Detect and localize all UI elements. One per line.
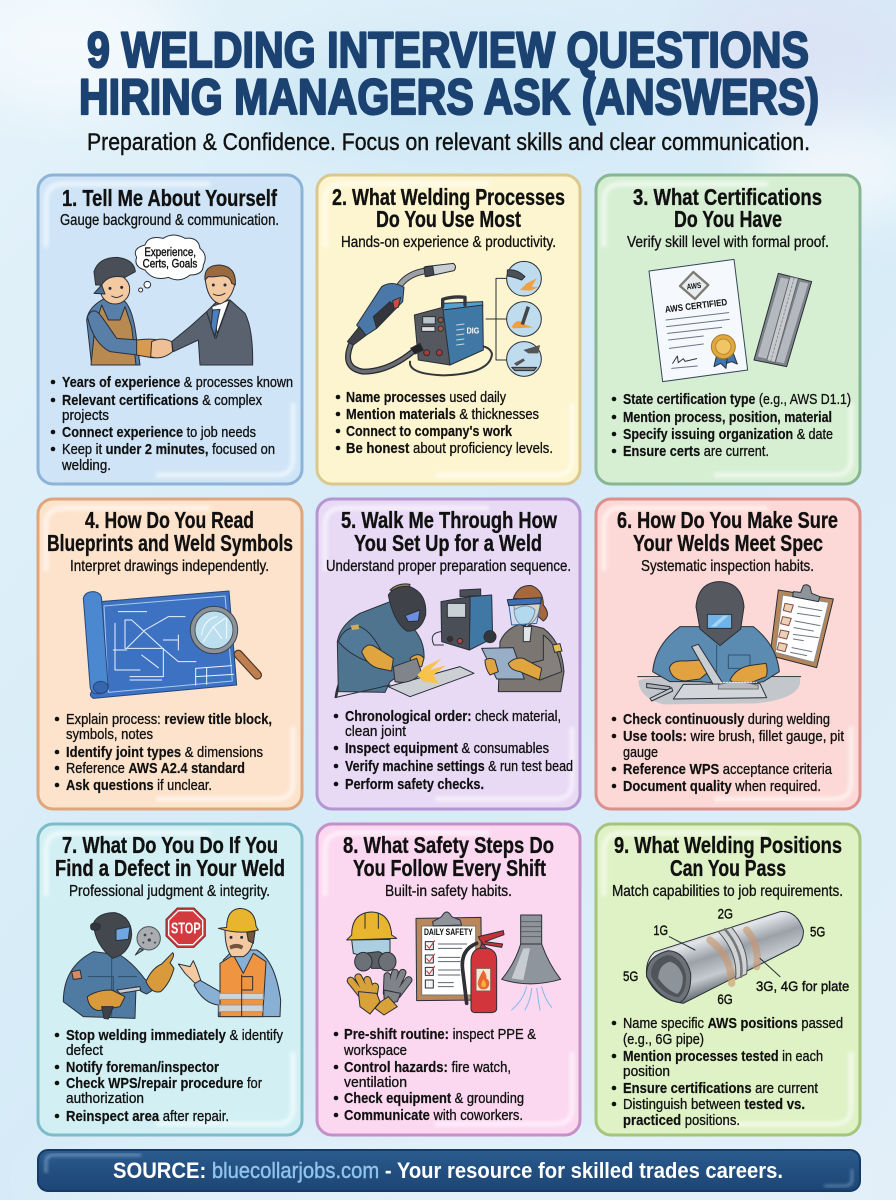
heading 8: You Follow Every Shift (353, 855, 546, 881)
subheading 6: Systematic inspection habits. (641, 558, 814, 575)
heading 8 (343, 832, 554, 881)
bullet list 7: Notify foreman/inspector (66, 1059, 219, 1076)
illustration: pipe with labelled welding positions (623, 905, 850, 1007)
heading 9: 9. What Welding Positions (614, 832, 842, 858)
heading 3 (633, 184, 822, 232)
bullet list 5: Inspect equipment & consumables (345, 740, 549, 757)
bullet list 1: welding. (61, 457, 111, 474)
heading 3: Do You Have (674, 206, 782, 232)
heading 7: 7. What Do You Do If You (62, 832, 278, 858)
heading 6: Your Welds Meet Spec (633, 530, 823, 556)
illustration: pipe with labelled welding positions: 3G, 4G for plate (756, 978, 850, 994)
subheading 9: Match capabilities to job requirements. (612, 883, 843, 900)
subtitle: Preparation & Confidence. Focus on relevant skills and clear communication. (87, 129, 810, 156)
illustration: AWS certificate and weld coupon: AWS (686, 281, 702, 292)
heading 4: 4. How Do You Read (85, 507, 254, 533)
bullet list 9: Ensure certifications are current (623, 1080, 819, 1097)
heading 9: Can You Pass (670, 855, 786, 881)
bullet list 8: Communicate with coworkers. (344, 1107, 523, 1124)
title (79, 22, 819, 125)
bullet list 9: Distinguish between tested vs. (623, 1096, 805, 1113)
subheading 4: Interpret drawings independently. (70, 558, 269, 575)
bullet list 5: Verify machine settings & run test bead (345, 758, 573, 775)
bullet list 1: projects (62, 407, 109, 424)
illustration: MIG welder and torch with process insets (347, 261, 541, 376)
heading 6 (617, 507, 838, 556)
bullet list 8: ventilation (344, 1074, 407, 1091)
bullet list 7: Check WPS/repair procedure for (66, 1075, 262, 1092)
illustration: pipe with labelled welding positions: 2G (718, 905, 733, 921)
panel 1: tell me about yourself (38, 175, 302, 484)
bullet list 9: Name specific AWS positions passed (623, 1015, 843, 1032)
subheading 1: Gauge background & communication. (60, 212, 279, 229)
bullet list 7: defect (66, 1042, 104, 1059)
heading 7 (55, 832, 285, 881)
bullet list 1: Relevant certifications & complex (62, 392, 262, 409)
bullet list 2: Connect to company's work (346, 423, 513, 440)
heading 8: 8. What Safety Steps Do (343, 832, 554, 858)
bullet list 6: Document quality when required. (623, 778, 821, 795)
bullet list 1 (51, 374, 293, 474)
bullet list 6 (612, 711, 845, 795)
bullet list 2: Name processes used daily (346, 389, 506, 406)
panel 4: blueprints and weld symbols (38, 499, 302, 809)
bullet list 9 (612, 1015, 843, 1129)
bullet list 4 (55, 711, 272, 794)
illustration: pipe with labelled welding positions: 5G (810, 924, 825, 940)
heading 5: 5. Walk Me Through How (341, 507, 557, 533)
bullet list 4: Ask questions if unclear. (66, 777, 212, 794)
subheading 8: Built-in safety habits. (385, 883, 512, 900)
illustration: welder reporting a defect to foreman with stop sign (63, 908, 281, 1019)
heading 4 (47, 507, 293, 556)
illustration: AWS certificate and weld coupon: AWS CERTIFIED (664, 297, 728, 315)
bullet list 6: Check continuously during welding (623, 711, 830, 728)
subheading 7: Professional judgment & integrity. (69, 883, 270, 900)
panel 6: meet spec (596, 499, 860, 809)
illustration: welder shaking hands with hiring manager: Experience, (144, 245, 196, 259)
panel 9: welding positions (596, 824, 860, 1135)
bullet list 7 (55, 1027, 283, 1125)
bullet list 7: Stop welding immediately & identify (66, 1027, 283, 1044)
bullet list 5: Chronological order: check material, (345, 708, 561, 725)
bullet list 4: Identify joint types & dimensions (66, 744, 263, 761)
subheading 3: Verify skill level with formal proof. (627, 234, 829, 251)
bullet list 6: gauge (623, 744, 658, 761)
illustration: pipe with labelled welding positions: 1G (653, 922, 668, 938)
heading 5: You Set Up for a Weld (354, 530, 542, 556)
bullet list 5: clean joint (345, 723, 407, 740)
bullet list 5 (334, 708, 573, 793)
bullet list 4: symbols, notes (66, 726, 153, 743)
bullet list 1: Connect experience to job needs (62, 424, 256, 441)
illustration: blueprint with magnifying glass (83, 591, 257, 698)
illustration: PPE, daily safety checklist, fire extinguisher and fume hood: DAILY SAFETY (424, 927, 473, 937)
source footer bar (38, 1150, 860, 1191)
bullet list 7: authorization (66, 1090, 144, 1107)
bullet list 1: Keep it under 2 minutes, focused on (62, 441, 275, 458)
illustration: MIG welder and torch with process insets: DIG (467, 326, 479, 335)
bullet list 3: Mention process, position, material (623, 409, 832, 426)
heading 2: Do You Use Most (376, 206, 521, 232)
bullet list 7: Reinspect area after repair. (66, 1108, 229, 1125)
illustration: pipe with labelled welding positions: 6G (717, 991, 733, 1007)
bullet list 1: Years of experience & processes known (62, 374, 293, 391)
bullet list 8: Control hazards: fire watch, (344, 1059, 511, 1076)
bullet list 9: practiced positions. (623, 1112, 740, 1129)
illustration: PPE, daily safety checklist, fire extinguisher and fume hood (347, 912, 561, 1015)
heading 4: Blueprints and Weld Symbols (47, 530, 293, 556)
bullet list 3: Specify issuing organization & date (623, 426, 833, 443)
bullet list 2: Mention materials & thicknesses (346, 406, 539, 423)
illustration: welder shaking hands with hiring manager: Certs, Goals (143, 257, 197, 271)
heading 5 (341, 507, 557, 556)
heading 9 (614, 832, 842, 881)
panel 3: certifications (596, 175, 860, 484)
illustration: welder grinding and inspector with tablet (335, 584, 564, 698)
heading 2: 2. What Welding Processes (332, 184, 565, 210)
heading 1: 1. Tell Me About Yourself (62, 185, 277, 211)
bullet list 9: position (623, 1063, 670, 1080)
bullet list 6: Use tools: wire brush, fillet gauge, pit (623, 728, 845, 745)
subheading 5: Understand proper preparation sequence. (326, 558, 571, 575)
subheading 2: Hands-on experience & productivity. (341, 234, 556, 251)
bullet list 8: Pre-shift routine: inspect PPE & (344, 1026, 536, 1043)
illustration: welder shaking hands with hiring manager (87, 235, 253, 365)
bullet list 4: Explain process: review title block, (66, 711, 272, 728)
bullet list 8 (334, 1026, 536, 1124)
illustration: AWS certificate and weld coupon (649, 259, 812, 382)
panel 7: defect (38, 824, 302, 1135)
illustration: welder inspecting weld with gauge and checklist (638, 582, 833, 704)
heading 7: Find a Defect in Your Weld (55, 855, 285, 881)
bullet list 3 (612, 391, 851, 460)
source text: SOURCE: bluecollarjobs.com - Your resource for skilled trades careers. (113, 1158, 783, 1183)
heading 3: 3. What Certifications (633, 184, 822, 210)
bullet list 4: Reference AWS A2.4 standard (66, 760, 245, 777)
bullet list 3: Ensure certs are current. (623, 443, 769, 460)
heading 6: 6. How Do You Make Sure (617, 507, 838, 533)
bullet list 9: Mention processes tested in each (623, 1048, 823, 1065)
bullet list 5: Perform safety checks. (345, 776, 484, 793)
illustration: welder reporting a defect to foreman with stop sign: STOP (171, 920, 201, 937)
bullet list 2: Be honest about proficiency levels. (346, 440, 553, 457)
panel 2: welding processes (317, 175, 580, 484)
illustration: pipe with labelled welding positions: 5G (623, 968, 638, 984)
bullet list 8: workspace (343, 1042, 407, 1059)
bullet list 9: (e.g., 6G pipe) (623, 1031, 704, 1048)
panel 5: weld setup (317, 499, 580, 809)
heading 2 (332, 184, 565, 232)
bullet list 6: Reference WPS acceptance criteria (623, 761, 833, 778)
bullet list 3: State certification type (e.g., AWS D1.1) (623, 391, 851, 408)
bullet list 2 (336, 389, 553, 457)
bullet list 8: Check equipment & grounding (344, 1090, 524, 1107)
panel 8: safety steps (317, 824, 580, 1135)
